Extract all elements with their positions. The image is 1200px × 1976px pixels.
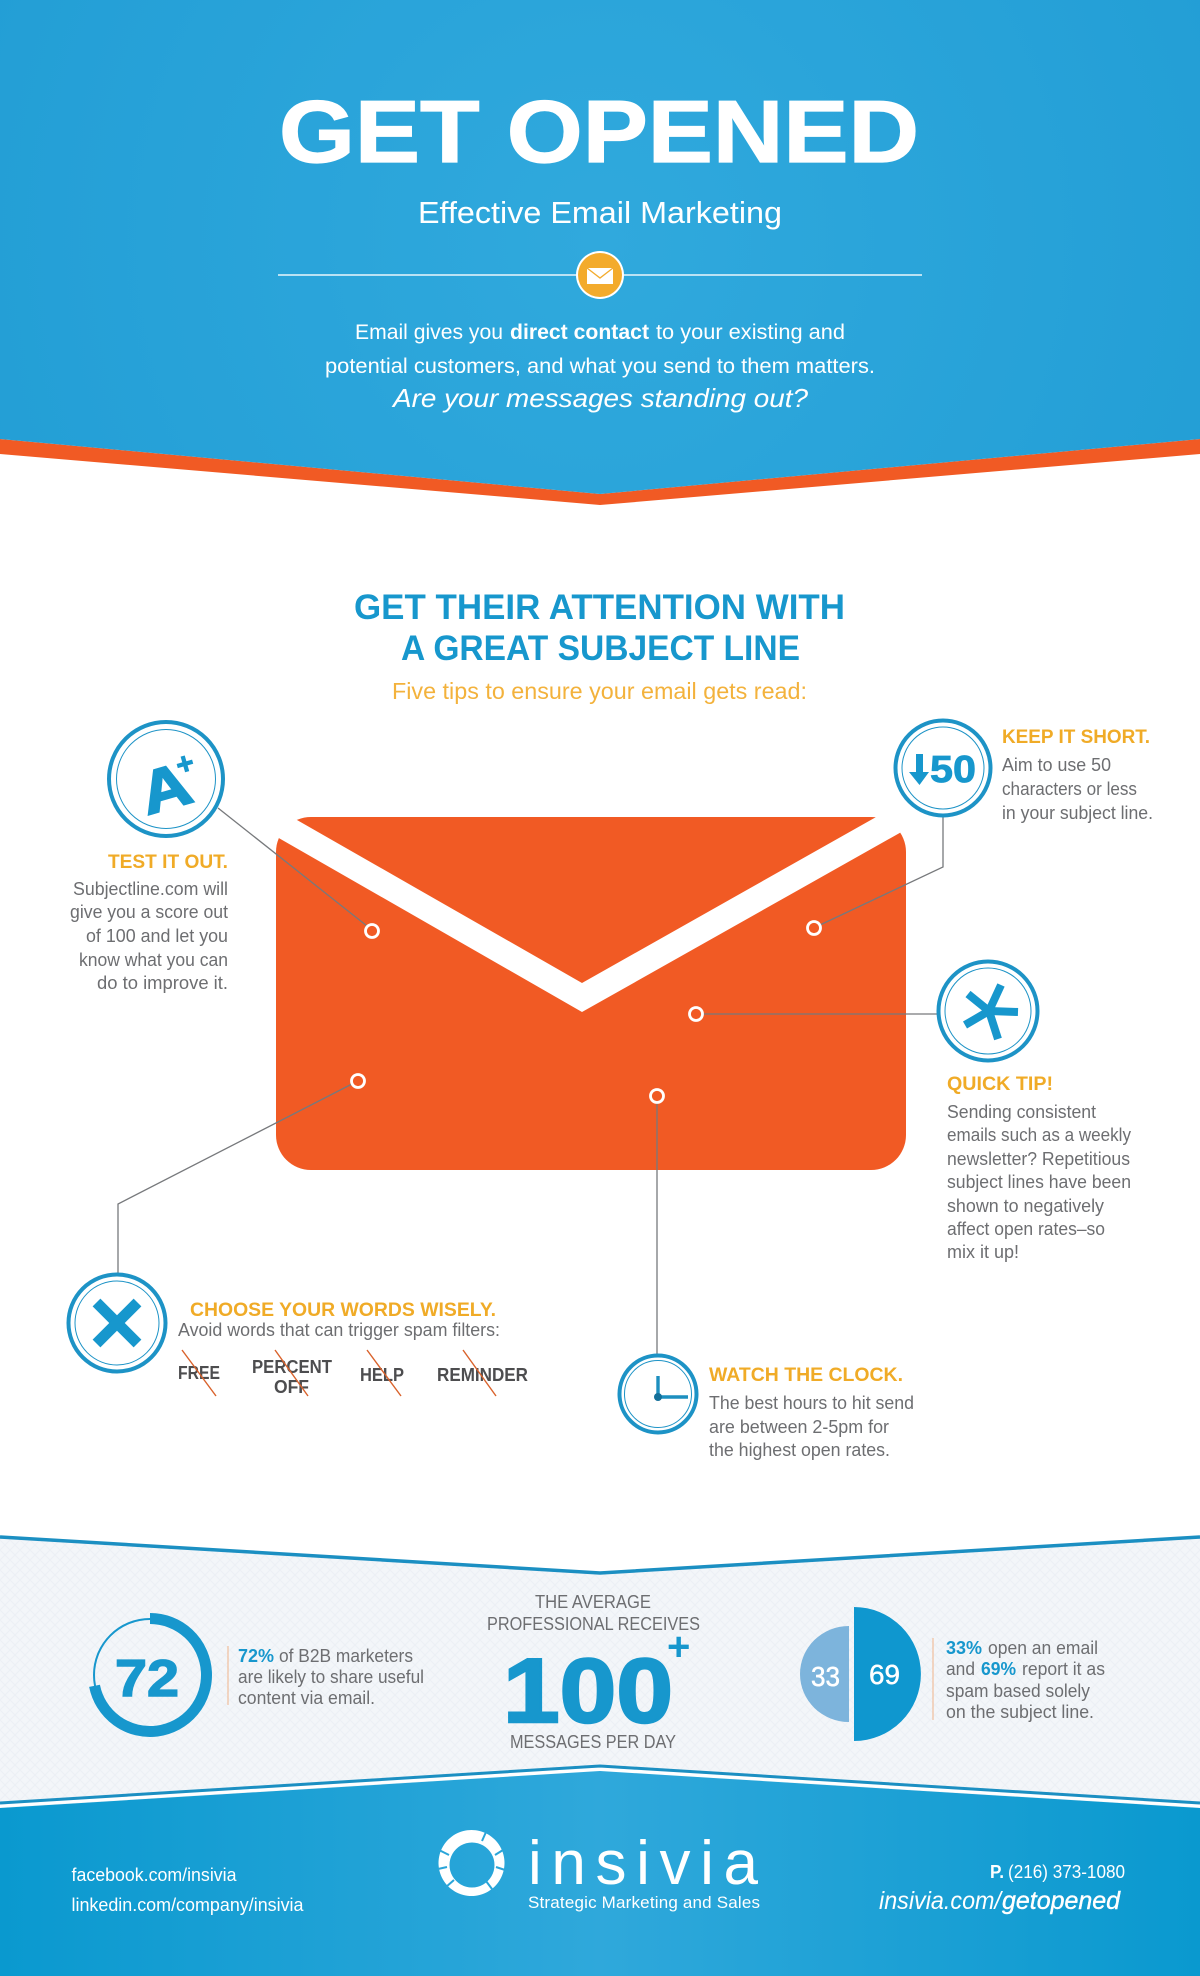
intro text: Email gives you (355, 321, 503, 344)
title: GET OPENED (279, 82, 919, 181)
icon: down arrow 50 (896, 720, 990, 816)
tip: keep it short: characters or less (1002, 779, 1137, 799)
tip: test it out: TEST IT OUT. (108, 852, 228, 873)
struck word: free (178, 1350, 220, 1396)
icon: asterisk (938, 962, 1038, 1060)
stat: 33 and 69 half circle chart (800, 1607, 921, 1741)
tip: choose your words wisely: CHOOSE YOUR WORDS WISELY. (190, 1300, 496, 1321)
tip: watch the clock: The best hours to hit send (709, 1393, 914, 1413)
divider with envelope badge (278, 251, 922, 299)
icon: A plus grade: A (132, 749, 199, 827)
social links: linkedin.com/company/insivia (72, 1895, 304, 1915)
stat: 33 and 69 half circle chart: 33 (811, 1661, 840, 1692)
struck word: percent off: PERCENT (252, 1357, 332, 1377)
intro text (325, 321, 875, 413)
stat text: 33 and 69 percent (933, 1638, 1105, 1722)
tip: watch the clock: are between 2-5pm for (709, 1417, 889, 1437)
contact details: getopened (1002, 1887, 1121, 1915)
icon: down arrow 50: 50 (930, 749, 976, 791)
intro text: Are your messages standing out? (391, 383, 809, 413)
tip: quick tip: shown to negatively (947, 1196, 1104, 1216)
tip: test it out: Subjectline.com will (73, 879, 228, 899)
tip: quick tip: newsletter? Repetitious (947, 1149, 1130, 1169)
struck word: free: FREE (178, 1363, 220, 1383)
contact details: P. (990, 1862, 1004, 1882)
stat: 100+ messages per day: MESSAGES PER DAY (510, 1732, 676, 1752)
social links: facebook.com/insivia (72, 1865, 237, 1885)
tip: test it out: give you a score out (70, 902, 228, 922)
tip: quick tip: QUICK TIP! (947, 1074, 1053, 1095)
stat text: 72 percent: content via email. (238, 1688, 375, 1708)
connector: quick tip (690, 1008, 938, 1020)
tip: test it out: of 100 and let you (86, 926, 228, 946)
intro text: direct contact (510, 321, 649, 344)
tip: choose your words wisely: Avoid words that can trigger spam filters: (178, 1320, 500, 1340)
tip: quick tip (947, 1074, 1131, 1262)
logo: wordmark: Strategic Marketing and Sales (528, 1893, 760, 1912)
tip: watch the clock (709, 1365, 914, 1460)
footer background (0, 1766, 1200, 1976)
struck word: percent off (252, 1350, 332, 1397)
contact details: insivia.com/ (879, 1887, 1004, 1915)
stat: 100+ messages per day: THE AVERAGE (535, 1592, 651, 1612)
envelope illustration (270, 812, 912, 1170)
connector: keep it short (808, 816, 943, 934)
tip: quick tip: emails such as a weekly (947, 1125, 1131, 1145)
stat text: 33 and 69 percent: spam based solely (946, 1681, 1090, 1701)
struck word: help: HELP (360, 1365, 404, 1385)
contact details: (216) 373-1080 (1008, 1862, 1125, 1882)
tip: test it out: know what you can (79, 950, 228, 970)
struck word: reminder: REMINDER (437, 1365, 528, 1385)
social links (72, 1865, 304, 1915)
stat text: 33 and 69 percent: 69% (981, 1659, 1016, 1679)
tip: choose your words wisely (178, 1300, 528, 1397)
section subheading: Five tips to ensure your email gets read: (392, 678, 807, 704)
struck word: help (360, 1350, 404, 1396)
stat text: 72 percent: of B2B marketers (279, 1646, 413, 1666)
section heading (354, 588, 845, 668)
intro text: to your existing and (656, 321, 845, 344)
tip: quick tip: Sending consistent (947, 1102, 1096, 1122)
stat: 100+ messages per day: 100 (503, 1641, 673, 1742)
icon: A plus grade (109, 722, 223, 836)
section heading: A GREAT SUBJECT LINE (401, 629, 800, 668)
tip: quick tip: affect open rates–so (947, 1219, 1105, 1239)
stat text: 33 and 69 percent: on the subject line. (946, 1702, 1094, 1722)
stat text: 33 and 69 percent: and (946, 1659, 975, 1679)
stat: 72 percent ring chart: 72 (115, 1650, 179, 1708)
icon: clock (620, 1356, 696, 1432)
tip: watch the clock: the highest open rates. (709, 1440, 890, 1460)
stat: 100+ messages per day: PROFESSIONAL RECEIVES (487, 1614, 700, 1634)
connector: watch the clock (650, 1090, 664, 1356)
tip: quick tip: mix it up! (947, 1242, 1019, 1262)
stat text: 72 percent (228, 1646, 424, 1708)
icon: A plus grade: + (172, 746, 198, 783)
tip: watch the clock: WATCH THE CLOCK. (709, 1365, 903, 1386)
stat text: 33 and 69 percent: 33% (946, 1638, 982, 1658)
struck word: percent off: OFF (274, 1377, 309, 1397)
stat text: 72 percent: 72% (238, 1646, 274, 1666)
subtitle: Effective Email Marketing (418, 195, 782, 230)
tip: test it out (70, 852, 228, 993)
tip: keep it short: Aim to use 50 (1002, 755, 1111, 775)
intro text: potential customers, and what you send to them matters. (325, 355, 875, 378)
connector: test it out (218, 808, 378, 938)
contact details (879, 1862, 1125, 1915)
tip: test it out: do to improve it. (97, 973, 228, 993)
stat: 33 and 69 half circle chart: 69 (869, 1659, 900, 1690)
struck word: reminder (437, 1350, 528, 1396)
stat text: 33 and 69 percent: report it as (1022, 1659, 1105, 1679)
stat text: 72 percent: are likely to share useful (238, 1667, 424, 1687)
stat text: 33 and 69 percent: open an email (988, 1638, 1098, 1658)
logo: brush ring (438, 1830, 505, 1896)
stat: 100+ messages per day: + (667, 1625, 690, 1669)
tip: keep it short: in your subject line. (1002, 803, 1153, 823)
tip: keep it short (1002, 727, 1153, 823)
header banner (0, 0, 1200, 505)
tip: quick tip: subject lines have been (947, 1172, 1131, 1192)
statistics band background (0, 1537, 1200, 1810)
connector: choose your words (118, 1074, 364, 1274)
icon: X mark (68, 1274, 166, 1372)
stat: 100+ messages per day (487, 1592, 700, 1752)
stat: 72 percent ring chart (94, 1618, 207, 1731)
logo: wordmark: insivia (528, 1829, 759, 1898)
section heading: GET THEIR ATTENTION WITH (354, 588, 845, 627)
tip: keep it short: KEEP IT SHORT. (1002, 727, 1150, 748)
